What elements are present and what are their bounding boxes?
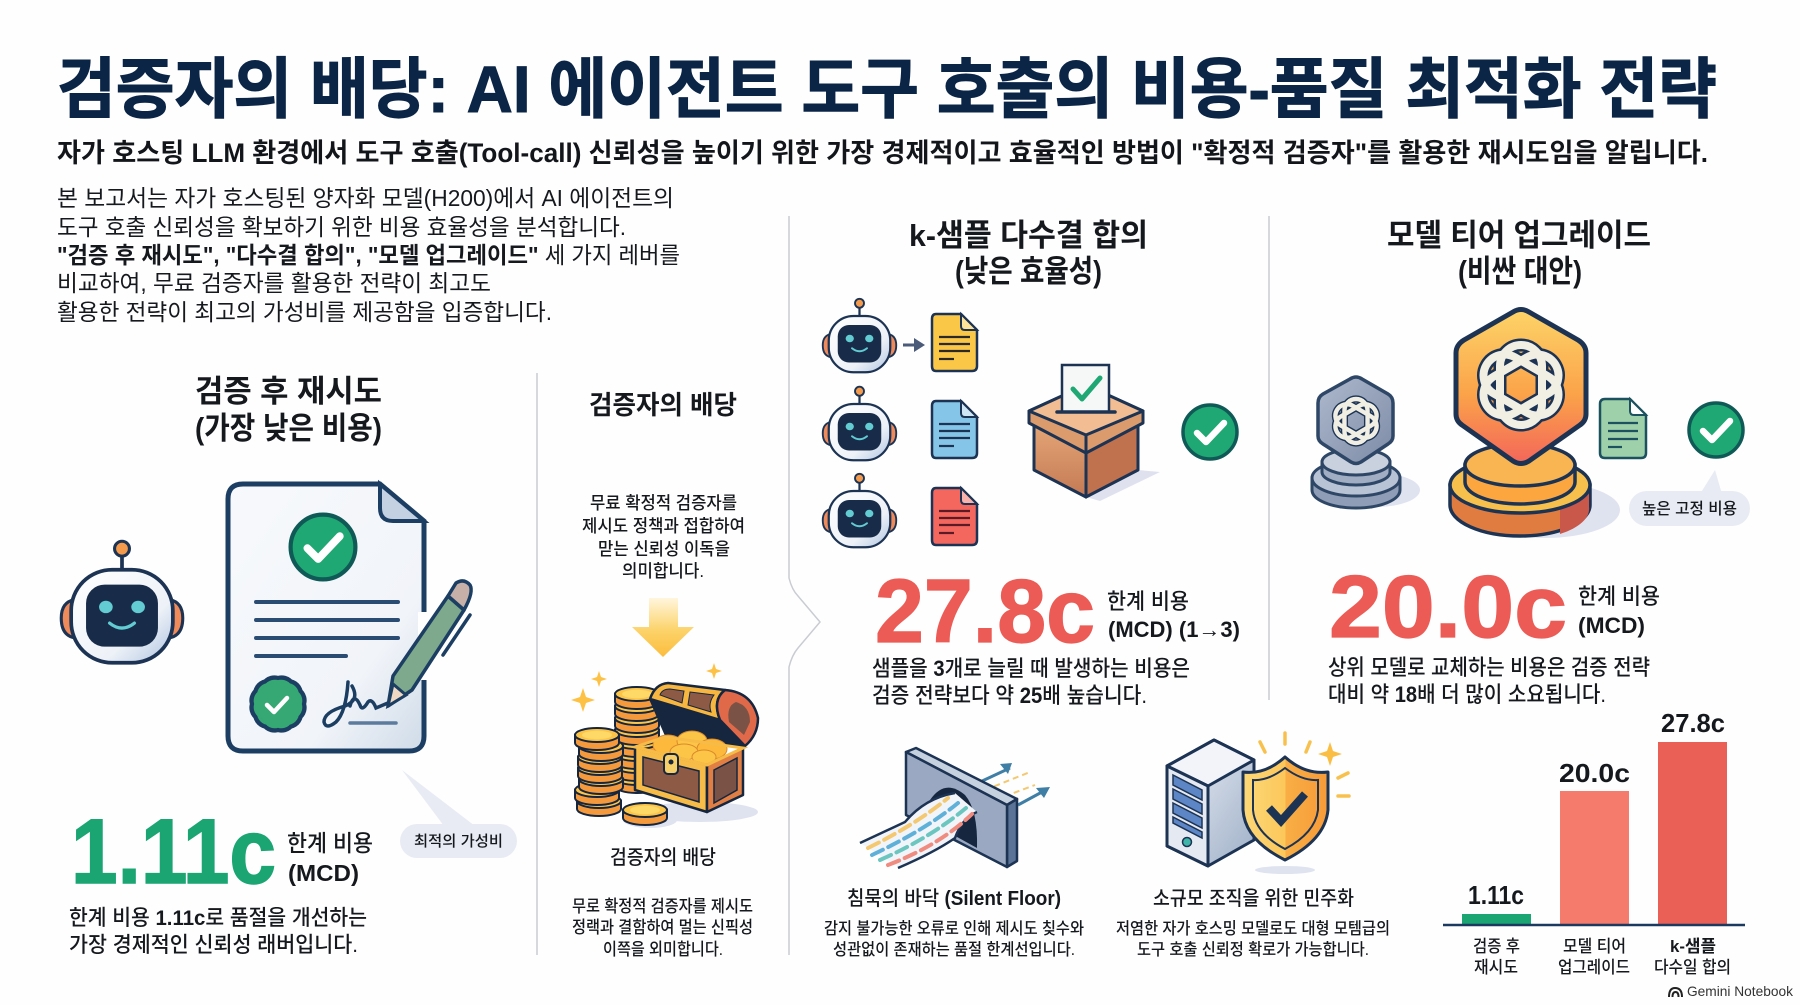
metric label: (MCD) <box>1578 613 1645 638</box>
panel: retry after validation <box>61 374 517 957</box>
axis labels <box>1473 937 1731 977</box>
panel: model tier upgrade <box>1312 218 1750 707</box>
text block: 제시도 정책과 접합하여 <box>582 516 745 536</box>
axis labels: k-샘플 <box>1670 937 1716 956</box>
text block: 저염한 자가 호스밍 모델로도 대형 모템급의 <box>1116 919 1390 938</box>
panel: silent floor <box>824 748 1084 959</box>
icon: ballot box <box>1029 365 1160 501</box>
heading: model tier upgrade <box>1387 218 1651 289</box>
icon: yellow document <box>932 314 977 371</box>
icon: blue document <box>932 401 977 458</box>
caption text <box>572 897 753 959</box>
metric label <box>1578 584 1660 638</box>
heading: retry after validation: (가장 낮은 비용) <box>195 411 382 446</box>
icon: signed document <box>228 484 471 751</box>
intro text block: 본 보고서는 자가 호스팅된 양자화 모델(H200)에서 AI 에이전트의 <box>57 185 674 211</box>
icon: three robots <box>823 299 896 547</box>
metric label: 한계 비용 <box>1578 584 1660 609</box>
icon: green check <box>1183 405 1237 459</box>
icon: server and shield <box>1167 733 1349 874</box>
text block: 의미합니다. <box>622 561 704 581</box>
intro text block: 비교하여, 무료 검증자를 활용한 전략이 최고도 <box>57 270 491 296</box>
value labels: 1.11c <box>1468 880 1524 910</box>
caption text: 이쯕을 외미합니다. <box>603 940 723 959</box>
text block: 도구 호출 신뢰정 확로가 가능합니다. <box>1137 940 1369 959</box>
panel: k-sample majority <box>823 218 1240 708</box>
icon: green document <box>1600 399 1646 458</box>
text block: 무료 확정적 검증자를 <box>590 493 737 513</box>
description: 검증 전략보다 약 25배 높습니다. <box>872 683 1147 708</box>
metric label <box>287 830 373 886</box>
metric label: (MCD) (1→3) <box>1108 617 1240 642</box>
intro text block: 활용한 전략이 최고의 가성비를 제공함을 입증합니다. <box>57 299 552 325</box>
heading: retry after validation: 검증 후 재시도 <box>195 374 382 409</box>
description: 가장 경제적인 신뢰성 래버입니다. <box>69 933 358 957</box>
heading: model tier upgrade: 모델 티어 업그레이드 <box>1387 218 1651 253</box>
text block <box>824 919 1084 959</box>
axis labels: 검증 후 <box>1473 937 1520 956</box>
bar chart: marginal cost comparison <box>1443 708 1745 977</box>
callout: high fixed cost <box>1629 470 1750 526</box>
intro text block: 도구 호출 신뢰성을 확보하기 위한 비용 효율성을 분석합니다. <box>57 214 626 240</box>
watermark: Gemini Notebook: Gemini Notebook <box>1687 983 1794 999</box>
icon: robot <box>61 541 183 663</box>
bar: k-sample majority <box>1658 742 1727 925</box>
description: 대비 약 18배 더 많이 소요됩니다. <box>1328 682 1606 707</box>
heading: k-sample majority: (낮은 효율성) <box>955 254 1102 289</box>
title: 검증자의 배당: AI 에이전트 도구 호출의 비용-품질 최적화 전략 <box>57 52 1717 126</box>
icon: treasure chest and coins <box>571 663 758 828</box>
caption text: 무로 확정적 검증자를 제시도 <box>572 897 753 916</box>
text block <box>582 493 745 581</box>
heading: validator dividend: 검증자의 배당 <box>589 390 737 420</box>
intro text block: "검증 후 재시도", "다수결 합의", "모델 업그레이드" 세 가지 레버를 <box>57 242 680 268</box>
heading: k-sample majority <box>909 218 1148 289</box>
description <box>69 906 367 957</box>
metric label: 한계 비용 <box>287 830 373 856</box>
callout: best value <box>400 770 517 858</box>
axis labels: 재시도 <box>1474 958 1518 977</box>
subtitle: 자가 호스팅 LLM 환경에서 도구 호출(Tool-call) 신뢰성을 높이기 위한 가장 경제적이고 효율적인 방법이 "확정적 검증자"를 활용한 재시도임을 알립니다. <box>57 138 1708 168</box>
bar: retry after validation <box>1462 914 1531 925</box>
icon: small model badge <box>1312 377 1420 508</box>
icon: green check <box>1689 403 1743 457</box>
heading: k-sample majority: k-샘플 다수결 합의 <box>909 218 1148 253</box>
heading: retry after validation <box>195 374 382 446</box>
caption heading: 검증자의 배당 <box>610 846 716 869</box>
value labels <box>1468 708 1725 910</box>
description: 한계 비용 1.11c로 품절을 개선하는 <box>69 906 367 930</box>
intro text block <box>57 185 680 325</box>
axis labels: 모델 티어 <box>1563 937 1626 956</box>
icon: stream through wall <box>860 748 1050 868</box>
heading: silent floor: 침묵의 바닥 (Silent Floor) <box>847 887 1061 910</box>
value labels: 27.8c <box>1661 708 1725 738</box>
metric: 20.0c: 20.0c <box>1329 557 1567 656</box>
text block: 맏는 신뢰성 이독을 <box>598 539 730 559</box>
description: 샘플을 3개로 늘릴 때 발생하는 비용은 <box>872 656 1190 681</box>
callout: high fixed cost: 높은 고정 비용 <box>1642 500 1737 518</box>
text block: 감지 불가능한 오류로 인해 제시도 칮수와 <box>824 919 1084 938</box>
text block: 성관없이 존재하는 품절 한계선입니다. <box>833 940 1075 959</box>
arrow: robot to document <box>903 338 925 352</box>
callout: best value: 최적의 가성비 <box>414 833 503 850</box>
metric label: (MCD) <box>288 860 359 886</box>
metric: 1.11c: 1.11c <box>71 801 276 903</box>
metric label: 한계 비용 <box>1107 589 1189 614</box>
value labels: 20.0c <box>1559 758 1630 788</box>
axis labels: 업그레이드 <box>1558 958 1630 977</box>
bar: model tier upgrade <box>1560 791 1629 925</box>
text block <box>1116 919 1390 959</box>
description: 상위 모델로 교체하는 비용은 검증 전략 <box>1328 655 1650 680</box>
arrow <box>632 598 694 657</box>
icon: large model badge <box>1450 310 1620 538</box>
panel: validator dividend <box>571 390 758 959</box>
panel: democratization <box>1116 733 1390 959</box>
metric label <box>1107 589 1240 642</box>
caption text: 정랙과 결함하여 멀는 신픽성 <box>572 918 753 937</box>
heading: democratization: 소규모 조직을 위한 민주화 <box>1153 887 1354 910</box>
axis labels: 다수일 합의 <box>1654 958 1731 977</box>
metric: 27.8c: 27.8c <box>875 562 1095 662</box>
description <box>872 656 1190 708</box>
heading: model tier upgrade: (비싼 대안) <box>1458 254 1582 289</box>
icon: red document <box>932 488 977 545</box>
description <box>1328 655 1650 707</box>
